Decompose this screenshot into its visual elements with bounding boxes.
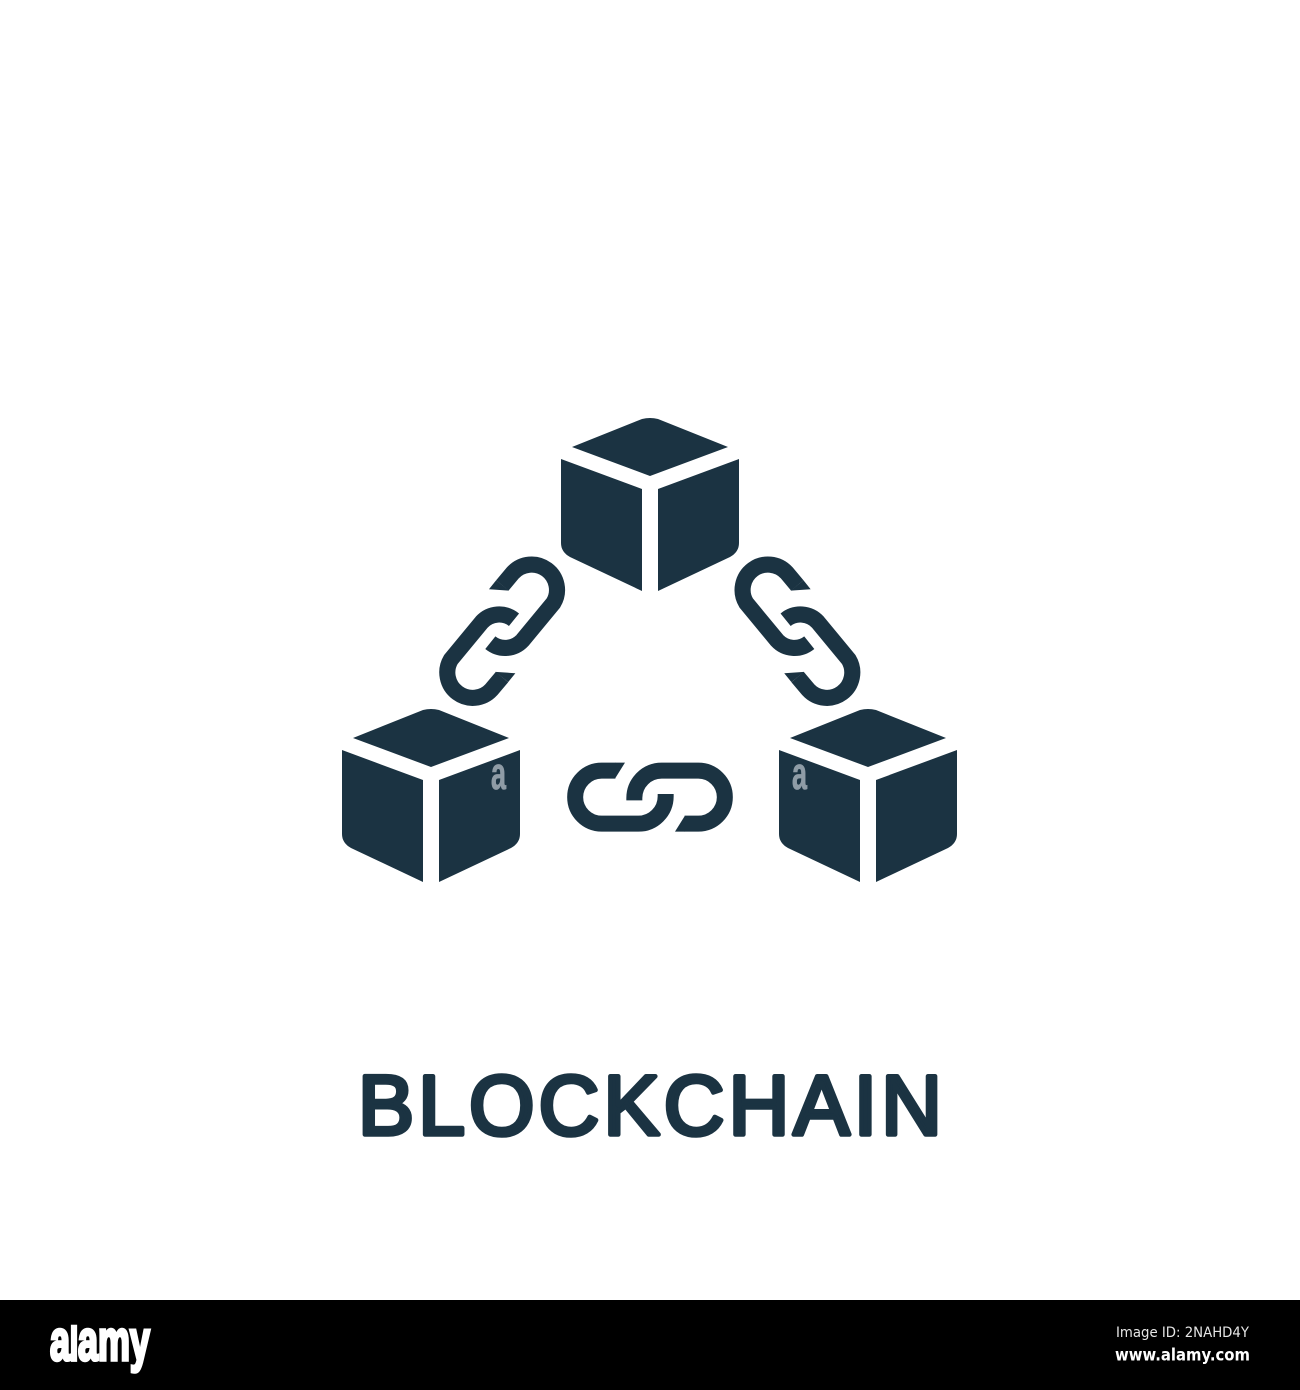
icon: blockchain network <box>342 418 957 882</box>
icon: left cube <box>342 709 520 882</box>
icon: top cube <box>561 418 739 591</box>
watermark: letter on left cube: a <box>491 748 507 799</box>
icon: horizontal chain link <box>575 763 725 832</box>
footer band <box>0 1300 1300 1390</box>
title: BLOCKCHAIN: BLOCKCHAIN <box>358 1058 946 1152</box>
logo: alamy: alamy <box>50 1310 150 1373</box>
website url: www.alamy.com <box>1115 1346 1250 1366</box>
watermark: letter on right cube: a <box>792 748 808 799</box>
icon: right cube <box>779 709 957 882</box>
icon: right diagonal chain link <box>743 565 852 698</box>
icon: left diagonal chain link <box>447 565 557 698</box>
image id: Image ID: 2NAHD4Y <box>1116 1325 1249 1341</box>
